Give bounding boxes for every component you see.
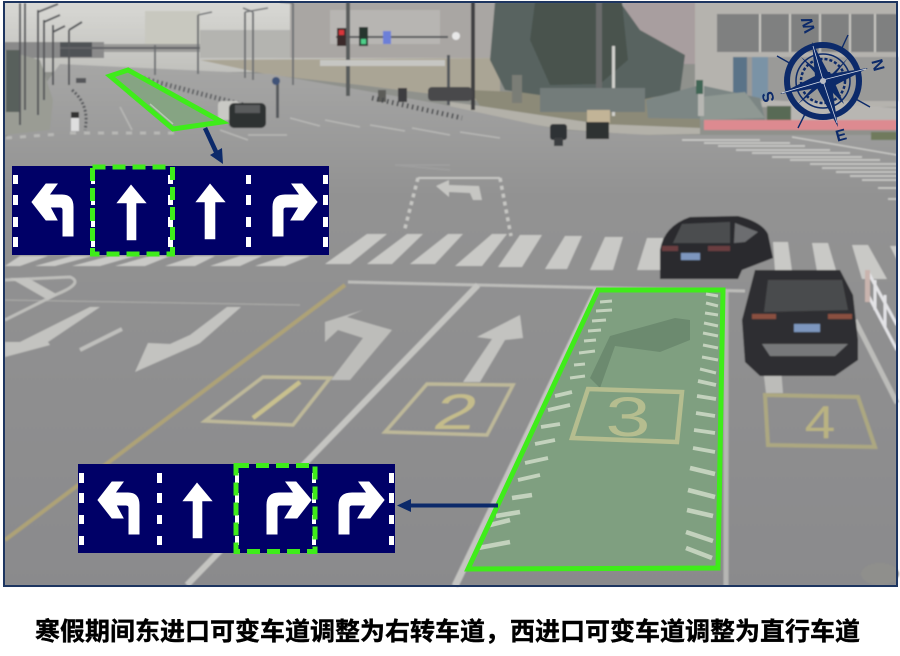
panel background <box>12 166 329 255</box>
lane tick marks right <box>686 294 718 558</box>
lane 1 number box <box>205 377 330 425</box>
variable lane dashed highlight <box>236 466 315 552</box>
right-side distant crosswalk <box>682 137 897 199</box>
lane 1 left-turn arrow <box>325 310 392 380</box>
lane 4 number box <box>763 368 875 448</box>
lane 2 number box: 2 <box>428 384 484 440</box>
long-bollard row across junction <box>372 98 462 118</box>
faded turn arrow <box>590 318 690 388</box>
lane 4 number box: 4 <box>805 396 835 448</box>
zebra crossing <box>5 234 897 279</box>
lane outline <box>468 290 723 569</box>
arrow: east lane to sign panel <box>397 499 498 512</box>
compass letters: W <box>799 14 819 34</box>
lane separators <box>13 175 328 247</box>
low hedge <box>871 132 897 140</box>
roadside fence <box>865 270 897 350</box>
icon: compass rose <box>759 14 887 146</box>
icon: straight arrow <box>183 483 212 538</box>
sky <box>4 2 504 72</box>
lane 2 straight arrow <box>463 315 523 382</box>
panel background <box>78 464 395 553</box>
lane number box <box>572 385 682 448</box>
compass letters <box>759 14 887 146</box>
turn guide markings <box>404 178 511 236</box>
black SUV <box>742 270 858 376</box>
trees <box>471 2 685 116</box>
parked cars far side <box>76 60 472 128</box>
icon: straight arrow <box>196 184 225 239</box>
left curb bollards <box>72 90 86 130</box>
stop lines and lane lines <box>5 277 897 586</box>
left pavement <box>4 50 53 135</box>
icon: left-turn arrow <box>32 184 73 236</box>
compass rings <box>787 45 859 117</box>
highlighted lane: west approach <box>110 70 222 129</box>
variable lane dashed highlight <box>92 167 172 254</box>
backdrop behind roadside <box>4 2 897 142</box>
road markings far side <box>6 107 500 170</box>
caption: 寒假期间东进口可变车道调整为右转车道，西进口可变车道调整为直行车道 <box>35 612 860 648</box>
distant buildings <box>4 2 705 64</box>
arrow: west lane to sign panel <box>205 128 223 164</box>
manhole cover <box>861 563 899 585</box>
icon: right-turn arrow <box>273 184 317 236</box>
compass letters: S <box>759 89 779 104</box>
black sedan <box>660 216 773 279</box>
icon: right-turn arrow (variable lane) <box>267 482 311 534</box>
compass long points <box>780 42 868 127</box>
pink barrier <box>704 120 897 130</box>
right building <box>646 2 898 122</box>
lane 2 number box <box>385 384 513 440</box>
roadside grass and sidewalk <box>450 90 700 135</box>
left trees and poles <box>6 2 293 125</box>
lane fill <box>468 290 723 569</box>
compass short points <box>798 57 848 104</box>
sign panel: west approach lanes <box>12 166 329 255</box>
icon: straight arrow (variable lane) <box>117 185 146 240</box>
icon: right-turn arrow <box>339 482 384 534</box>
highlighted lane: east approach <box>468 290 723 569</box>
median bollards <box>130 75 262 110</box>
motorcyclists <box>71 88 610 146</box>
compass letters: E <box>834 126 849 146</box>
lane separators <box>79 473 394 545</box>
lane tick marks left <box>478 301 612 548</box>
dry grass field <box>200 58 500 104</box>
lane number box: 3 <box>605 385 651 448</box>
compass ticks <box>777 35 870 128</box>
icon: left-turn arrow <box>98 482 139 534</box>
road surface <box>4 64 897 586</box>
sign panel: east approach lanes <box>78 464 395 553</box>
traffic signal mast <box>272 2 704 118</box>
compass letters: N <box>867 57 887 73</box>
opposite-direction arrows <box>5 278 241 372</box>
compass highlights <box>782 46 866 123</box>
